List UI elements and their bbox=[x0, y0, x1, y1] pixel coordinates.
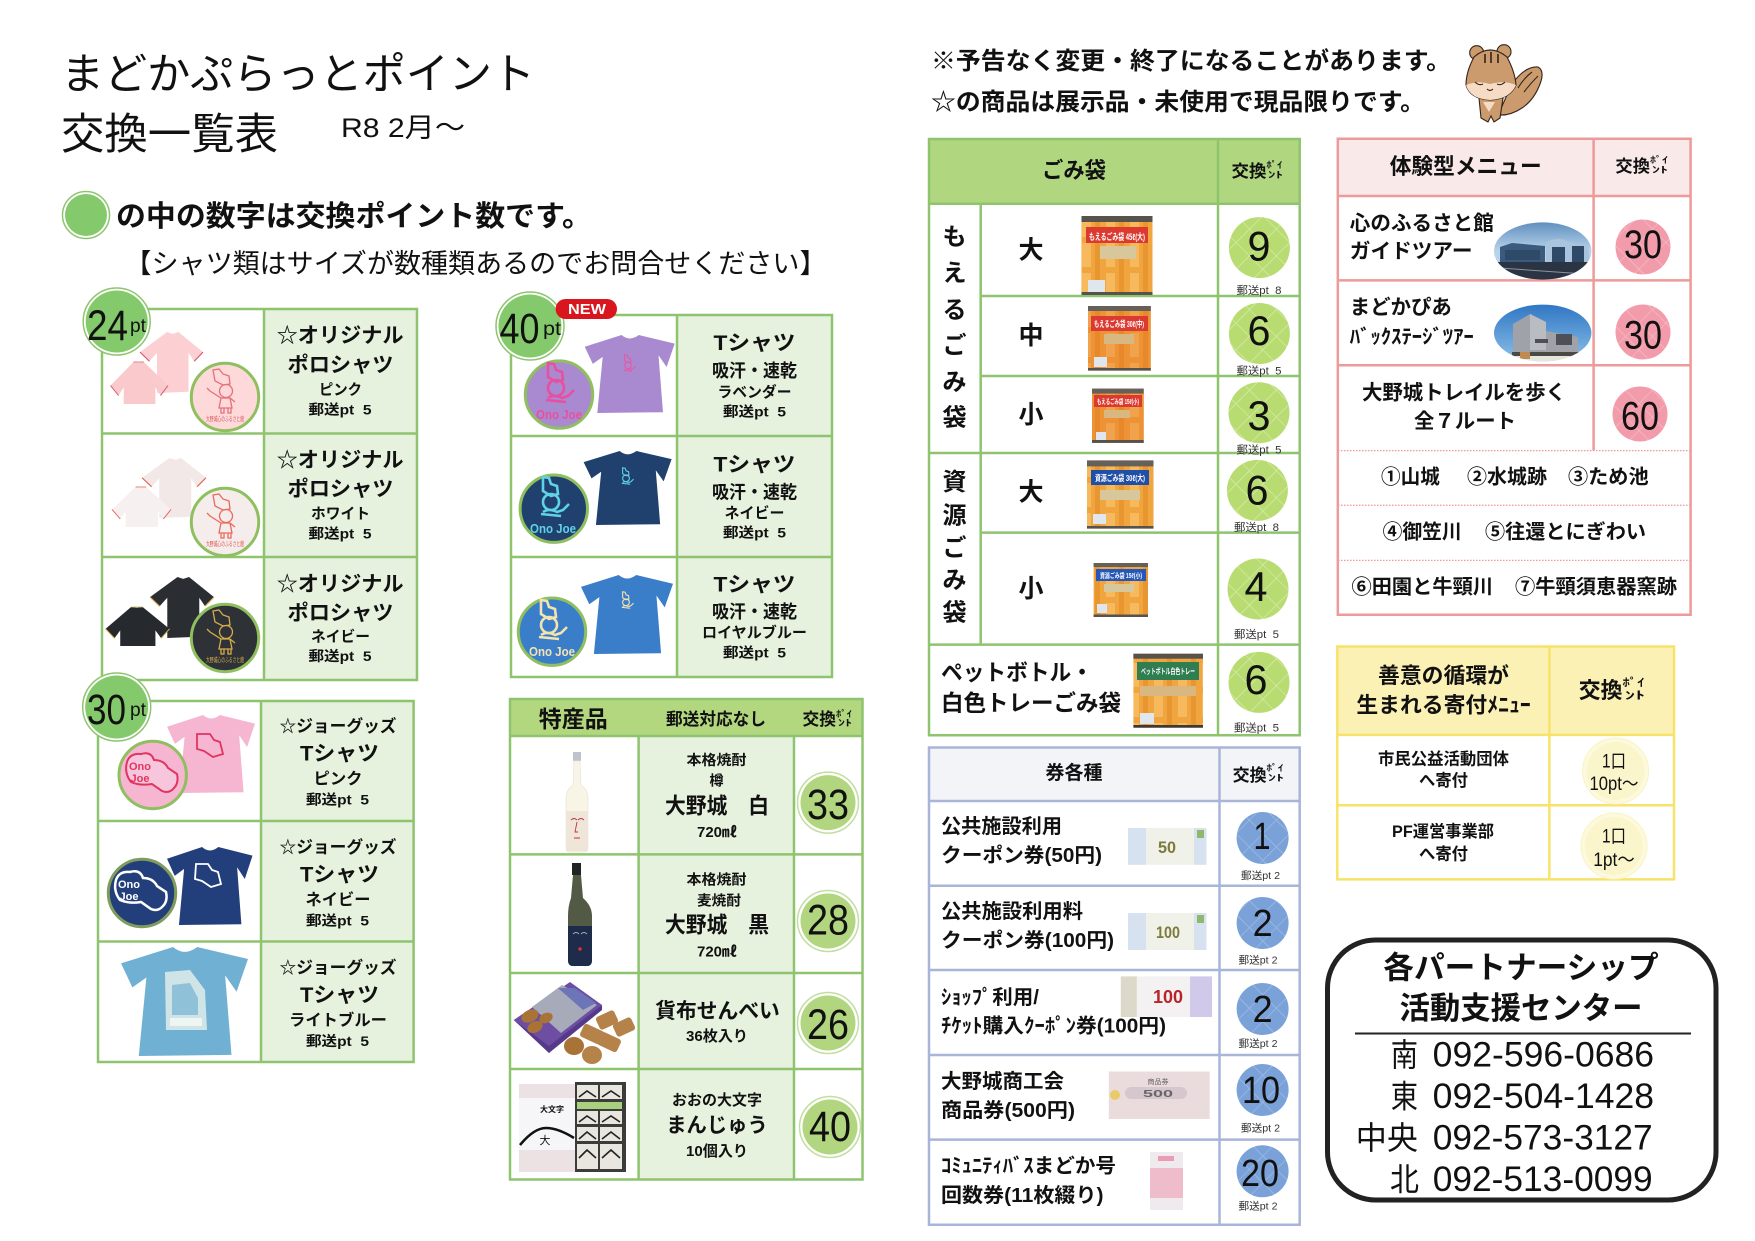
vertical label: recyclable bbox=[942, 469, 966, 626]
point circles bbox=[1237, 812, 1289, 1197]
voucher names: 大野城商工会 bbox=[941, 1070, 1064, 1093]
voucher names: 公共施設利用 bbox=[941, 815, 1062, 838]
product text bbox=[712, 332, 797, 420]
trail routes: ④御笠川 bbox=[1383, 519, 1462, 543]
panel: experience menu bbox=[1338, 139, 1691, 615]
product text: 郵送pt 5 bbox=[723, 645, 786, 661]
product text: 郵送pt 5 bbox=[306, 912, 369, 928]
product text bbox=[277, 573, 404, 664]
header: 交換 bbox=[1232, 162, 1266, 181]
icon: pet bottle bag bbox=[1133, 654, 1203, 728]
new tag: NEW bbox=[568, 302, 606, 318]
shirts: lavender tee: Ono Joe bbox=[536, 407, 582, 422]
donation circle 1pt bbox=[1581, 813, 1647, 879]
shirts: pink tee bbox=[119, 715, 255, 809]
point circles bbox=[798, 772, 860, 1158]
icon: large combustible bag: もえるごみ袋 45ℓ(大) bbox=[1089, 231, 1145, 242]
vertical label: combustible: ご bbox=[942, 332, 966, 360]
product text: Tシャツ bbox=[300, 743, 379, 766]
vertical label: recyclable: 資 bbox=[942, 469, 966, 496]
icon: white shochu bottle bbox=[566, 752, 588, 852]
point circles: 28 bbox=[807, 896, 849, 944]
product text: Tシャツ bbox=[300, 984, 379, 1007]
phone numbers: 092-573-3127 bbox=[1433, 1118, 1653, 1158]
point circles: 20 bbox=[1241, 1153, 1279, 1195]
shipping notes: 郵送pt 8 bbox=[1234, 520, 1279, 534]
point circles: 30 bbox=[1624, 223, 1662, 267]
panel: partnership centers bbox=[1328, 940, 1716, 1200]
notice text bbox=[931, 47, 1451, 116]
phone numbers: 092-513-0099 bbox=[1433, 1160, 1653, 1199]
vertical label: combustible: も bbox=[942, 224, 966, 251]
icon: small combustible bag bbox=[1092, 389, 1144, 443]
point circles: 2 bbox=[1253, 903, 1273, 945]
phone numbers: 092-504-1428 bbox=[1433, 1077, 1654, 1116]
voucher names: 公共施設利用料 bbox=[941, 900, 1083, 923]
icon: manju box bbox=[519, 1082, 626, 1172]
header: ﾎﾟｲ bbox=[1622, 676, 1644, 689]
shipping notes: 郵送pt 5 bbox=[1236, 364, 1282, 378]
voucher names: ｼｮｯﾌﾟ利用/ bbox=[941, 986, 1039, 1009]
product text: ロイヤルブルー bbox=[702, 623, 807, 641]
product text: 郵送pt 5 bbox=[308, 526, 372, 542]
menu text: backstage tour bbox=[1350, 296, 1474, 348]
product text: 麦焼酎 bbox=[697, 893, 741, 909]
photo: Kokoro no Furusato museum bbox=[1494, 222, 1592, 280]
badge: 30pt: pt bbox=[130, 700, 147, 721]
voucher names: 商品券(500円) bbox=[941, 1099, 1075, 1122]
product text: ネイビー bbox=[311, 627, 370, 645]
donation circle 1pt: 1口 bbox=[1602, 826, 1626, 848]
product text: 吸汗・速乾 bbox=[712, 361, 797, 381]
trail routes bbox=[1352, 465, 1677, 598]
coupon 100: 100 bbox=[1156, 923, 1180, 942]
panel: vouchers bbox=[929, 748, 1300, 1225]
badge: 24pt bbox=[83, 288, 150, 355]
header: ﾎﾟｲ bbox=[836, 709, 853, 719]
coupon 100 bbox=[1128, 913, 1206, 950]
trail routes: ⑥田園と牛頸川 bbox=[1352, 576, 1493, 598]
donation row text: PF運営事業部 bbox=[1392, 822, 1494, 841]
shipping notes: 郵送pt 2 bbox=[1238, 953, 1278, 966]
heading: 活動支援センター bbox=[1400, 991, 1642, 1026]
icon: pet bottle bag: ペットボトル白色トレー bbox=[1141, 666, 1195, 676]
product text bbox=[280, 957, 396, 1049]
voucher names bbox=[941, 815, 1166, 1207]
point circles: 2 bbox=[1253, 989, 1273, 1031]
shipping notes: 郵送pt 2 bbox=[1241, 869, 1280, 882]
product text: Tシャツ bbox=[714, 454, 796, 477]
point circles: 6 bbox=[1244, 656, 1268, 703]
icon: large recyclable bag bbox=[1087, 460, 1154, 529]
point circles bbox=[1612, 220, 1670, 442]
panel: 40pt T-shirts bbox=[511, 315, 832, 677]
header bbox=[1356, 663, 1645, 718]
donation row text bbox=[1392, 822, 1494, 863]
header: 交換 bbox=[802, 710, 836, 729]
title: 交換一覧表 bbox=[61, 111, 278, 159]
point circles: 60 bbox=[1621, 394, 1659, 438]
product text: 720㎖ bbox=[697, 944, 737, 960]
shipping notes: 郵送pt 2 bbox=[1238, 1037, 1278, 1050]
phone numbers: 092-596-0686 bbox=[1433, 1036, 1654, 1074]
phone numbers bbox=[1356, 1036, 1654, 1199]
phone numbers: 中央 bbox=[1356, 1120, 1418, 1156]
product text: ピンク bbox=[314, 770, 362, 788]
product text: ポロシャツ bbox=[288, 354, 394, 377]
header: ﾝﾄ bbox=[1268, 170, 1283, 180]
point circles: 4 bbox=[1244, 563, 1268, 610]
product text: 郵送pt 5 bbox=[308, 648, 372, 664]
product text: Tシャツ bbox=[714, 573, 796, 596]
product text: ☆オリジナル bbox=[277, 324, 404, 347]
product text: 吸汗・速乾 bbox=[712, 482, 797, 502]
product text bbox=[665, 872, 769, 960]
point circles: 40 bbox=[809, 1103, 851, 1151]
product text: 郵送pt 5 bbox=[306, 792, 369, 808]
shirts: lavender tee bbox=[525, 335, 675, 428]
donation circle 10pt: 1口 bbox=[1602, 752, 1626, 772]
point circles: 6 bbox=[1248, 307, 1270, 354]
icon: senbei box bbox=[514, 982, 636, 1064]
vertical label: combustible: み bbox=[942, 369, 966, 396]
vertical label: recyclable: 源 bbox=[942, 502, 966, 530]
icon: medium combustible bag bbox=[1088, 306, 1151, 371]
phone numbers: 東 bbox=[1391, 1078, 1418, 1114]
product text: 10個入り bbox=[686, 1143, 748, 1160]
icon: small recyclable bag: 資源ごみ袋 15ℓ(小) bbox=[1100, 571, 1142, 580]
product text: 36枚入り bbox=[686, 1027, 748, 1045]
donation row text bbox=[1378, 748, 1509, 790]
product text: 貨布せんべい bbox=[655, 999, 780, 1023]
title: まどかぷらっとポイント bbox=[61, 51, 535, 99]
menu text: guide tour bbox=[1350, 212, 1494, 263]
notice text: ※予告なく変更・終了になることがあります。 bbox=[931, 47, 1451, 75]
product text: 吸汗・速乾 bbox=[712, 602, 797, 622]
product text: Tシャツ bbox=[300, 863, 379, 886]
header: 交換 bbox=[1615, 157, 1650, 176]
trail routes: ②水城跡 bbox=[1467, 465, 1547, 488]
icon: manju box: 大文字 bbox=[540, 1104, 564, 1114]
product text: 本格焼酎 bbox=[686, 752, 746, 768]
size labels: 大 bbox=[1018, 236, 1044, 264]
title bbox=[61, 51, 535, 159]
voucher names: 回数券(11枚綴り) bbox=[941, 1184, 1104, 1207]
icon: squirrel mascot bbox=[1466, 45, 1542, 122]
coupon shop 100 bbox=[1121, 976, 1212, 1017]
icon: large recyclable bag: 資源ごみ袋 30ℓ(大) bbox=[1095, 473, 1145, 483]
icon: manju box: 大 bbox=[540, 1133, 550, 1147]
vertical label: combustible: え bbox=[942, 260, 966, 287]
product text: ☆ジョーグッズ bbox=[280, 957, 396, 977]
badge: 24pt: pt bbox=[130, 316, 147, 337]
header: 郵送対応なし bbox=[666, 710, 766, 729]
product text bbox=[665, 752, 769, 841]
icon: small recyclable bag bbox=[1094, 563, 1148, 617]
coupon gift 500: 500 bbox=[1143, 1089, 1174, 1100]
shipping notes: 郵送pt 5 bbox=[1234, 627, 1279, 641]
icon: large combustible bag bbox=[1082, 216, 1152, 295]
heading bbox=[1383, 950, 1659, 1026]
photo: Madokapia bbox=[1494, 304, 1592, 362]
product text: ホワイト bbox=[311, 506, 370, 523]
shirts: white polo bbox=[112, 458, 259, 556]
panel: garbage bags bbox=[929, 139, 1300, 735]
product text: まんじゅう bbox=[666, 1114, 768, 1137]
notice text: ☆の商品は展示品・未使用で現品限りです。 bbox=[931, 89, 1425, 116]
shirts: navy polo bbox=[106, 577, 259, 672]
badge: 40pt: pt bbox=[543, 319, 562, 340]
shipping notes bbox=[1234, 283, 1282, 735]
header: 善意の循環が bbox=[1378, 663, 1509, 688]
donation circle 1pt: 1pt～ bbox=[1593, 850, 1635, 871]
badge: 24pt: 24 bbox=[87, 302, 128, 350]
vertical label: recyclable: ご bbox=[942, 534, 966, 562]
point circles: 1 bbox=[1254, 816, 1270, 858]
menu text: backstage tour: ﾊﾞｯｸｽﾃｰｼﾞﾂｱｰ bbox=[1350, 326, 1474, 348]
coupon gift 500: 商品券 bbox=[1148, 1077, 1168, 1086]
panel: specialty products bbox=[510, 699, 862, 1180]
pet bottle tray bag label: ペットボトル・ bbox=[941, 660, 1093, 686]
point circles: 30 bbox=[1624, 314, 1662, 358]
product text bbox=[277, 324, 404, 417]
date note: R8 2月～ bbox=[341, 113, 465, 143]
donation row text: へ寄付 bbox=[1419, 771, 1468, 790]
header: ﾎﾟｲ bbox=[1266, 763, 1284, 773]
phone numbers: 北 bbox=[1390, 1162, 1419, 1198]
product text bbox=[277, 449, 404, 542]
size labels: 小 bbox=[1018, 401, 1044, 429]
shirts: pink polo: 大野城心のふるさと館 bbox=[206, 414, 244, 423]
point circles: 9 bbox=[1248, 222, 1270, 270]
shirts: navy polo: 大野城心のふるさと館 bbox=[206, 655, 244, 664]
badge: 30pt: 30 bbox=[87, 686, 126, 734]
product text: Tシャツ bbox=[714, 332, 796, 355]
shipping notes: 郵送pt 5 bbox=[1236, 443, 1282, 457]
size labels bbox=[1018, 236, 1044, 603]
icon: small combustible bag: もえるごみ袋 15ℓ(小) bbox=[1097, 397, 1139, 406]
trail routes: ⑤往還とにぎわい bbox=[1485, 519, 1646, 543]
shipping notes: 郵送pt 5 bbox=[1234, 721, 1279, 735]
product text: ネイビー bbox=[724, 504, 784, 522]
header: ﾝﾄ bbox=[1268, 773, 1284, 783]
icon: black shochu bottle bbox=[568, 863, 592, 966]
coupon shop 100: 100 bbox=[1153, 987, 1183, 1007]
voucher names: クーポン券(100円) bbox=[941, 929, 1114, 952]
product text: ピンク bbox=[319, 381, 362, 398]
header bbox=[1390, 154, 1669, 179]
new tag bbox=[556, 299, 617, 319]
product text: ポロシャツ bbox=[288, 478, 394, 501]
legend text: の中の数字は交換ポイント数です。 bbox=[116, 200, 592, 233]
shirts: royal blue tee: Ono Joe bbox=[529, 644, 575, 659]
menu text: guide tour: ガイドツアー bbox=[1350, 240, 1472, 263]
shirts: navy tee bbox=[108, 847, 252, 927]
header: ごみ袋 bbox=[1042, 158, 1106, 183]
vertical label: recyclable: 袋 bbox=[942, 600, 966, 626]
product text bbox=[280, 716, 396, 808]
heading: 各パートナーシップ bbox=[1383, 950, 1659, 986]
shipping notes: 郵送pt 8 bbox=[1236, 283, 1282, 297]
product text: 郵送pt 5 bbox=[308, 401, 372, 417]
donation row text: へ寄付 bbox=[1419, 844, 1468, 863]
pet bottle tray bag label: 白色トレーごみ袋 bbox=[941, 690, 1121, 716]
header: ﾎﾟｲ bbox=[1650, 155, 1669, 165]
shipping notes bbox=[1238, 869, 1280, 1213]
voucher names: ﾁｹｯﾄ購入ｸｰﾎﾟﾝ券(100円) bbox=[941, 1014, 1166, 1038]
menu text: trail: 全７ルート bbox=[1414, 410, 1516, 433]
product text: ラベンダー bbox=[718, 383, 792, 401]
shirts: pink polo bbox=[110, 332, 259, 431]
vertical label: combustible: 袋 bbox=[942, 404, 966, 432]
shirts: light blue tee bbox=[121, 947, 248, 1056]
product text: 郵送pt 5 bbox=[723, 404, 786, 420]
vertical label: recyclable: み bbox=[942, 567, 966, 594]
shirts: white polo: 大野城心のふるさと館 bbox=[206, 539, 244, 548]
panel: donation menu bbox=[1337, 646, 1674, 879]
point circles: 26 bbox=[807, 1001, 849, 1049]
badge: 40pt: 40 bbox=[500, 305, 540, 353]
trail routes: ③ため池 bbox=[1568, 465, 1649, 488]
product text: ☆オリジナル bbox=[277, 449, 404, 472]
menu text: trail: 大野城トレイルを歩く bbox=[1362, 381, 1566, 404]
product text: 大野城 黒 bbox=[665, 913, 769, 938]
coupon 50 bbox=[1128, 828, 1206, 865]
product text: 大野城 白 bbox=[665, 794, 769, 818]
header: 交換 bbox=[1233, 766, 1267, 785]
menu text: trail bbox=[1362, 381, 1566, 433]
product text bbox=[655, 999, 780, 1045]
product text bbox=[702, 573, 807, 661]
product text: ☆オリジナル bbox=[277, 573, 404, 596]
bus ticket bbox=[1150, 1152, 1183, 1210]
trail routes: ⑦牛頸須恵器窯跡 bbox=[1515, 576, 1677, 598]
badge: 30pt bbox=[83, 673, 151, 741]
vertical label: combustible bbox=[942, 224, 966, 432]
header: 生まれる寄付ﾒﾆｭｰ bbox=[1356, 694, 1531, 718]
badge: 40pt bbox=[496, 292, 564, 360]
phone numbers: 南 bbox=[1391, 1037, 1418, 1073]
shipping notes: 郵送pt 2 bbox=[1238, 1200, 1278, 1213]
product text bbox=[666, 1091, 768, 1160]
voucher names: ｺﾐｭﾆﾃｨﾊﾞｽまどか号 bbox=[941, 1155, 1116, 1178]
product text: ☆ジョーグッズ bbox=[280, 716, 396, 736]
product text: 720㎖ bbox=[697, 824, 737, 841]
icon: medium combustible bag: もえるごみ袋 30ℓ(中) bbox=[1094, 319, 1144, 329]
product text: ライトブルー bbox=[289, 1011, 387, 1030]
product text: ☆ジョーグッズ bbox=[280, 837, 396, 857]
shirts: navy tee: Ono Joe bbox=[530, 521, 576, 536]
product text: ポロシャツ bbox=[288, 602, 394, 625]
product text: 本格焼酎 bbox=[686, 872, 746, 888]
product text bbox=[712, 454, 797, 541]
header: ﾝﾄ bbox=[1652, 165, 1668, 175]
panel: 24pt polo shirts bbox=[102, 309, 417, 680]
header bbox=[539, 706, 853, 732]
product text: 郵送pt 5 bbox=[306, 1033, 369, 1049]
header bbox=[1046, 761, 1284, 785]
panel: 30pt Jo goods T-shirts bbox=[98, 701, 414, 1062]
point circles: 3 bbox=[1248, 392, 1270, 439]
header: 券各種 bbox=[1046, 761, 1102, 784]
point circles: 33 bbox=[807, 781, 849, 829]
shirts: pink tee: Joe bbox=[131, 773, 149, 785]
point circles bbox=[1227, 217, 1290, 713]
header: ﾎﾟｲ bbox=[1266, 160, 1283, 170]
product text: ネイビー bbox=[306, 890, 370, 909]
menu text: backstage tour: まどかぴあ bbox=[1350, 296, 1452, 319]
coupon gift 500 bbox=[1109, 1072, 1210, 1119]
legend: green circle bbox=[62, 192, 110, 238]
product text: 樽 bbox=[710, 772, 724, 788]
coupon 50: 50 bbox=[1158, 838, 1176, 857]
voucher names: クーポン券(50円) bbox=[941, 844, 1102, 867]
product text: 郵送pt 5 bbox=[723, 525, 786, 541]
size labels: 大 bbox=[1018, 478, 1044, 506]
size labels: 小 bbox=[1018, 575, 1044, 603]
shirts: navy tee: Joe bbox=[120, 891, 138, 903]
donation circle 10pt bbox=[1583, 738, 1649, 804]
size labels: 中 bbox=[1018, 322, 1044, 350]
product text bbox=[280, 837, 396, 928]
shirts: pink tee: Ono bbox=[129, 761, 151, 773]
vertical label: combustible: る bbox=[942, 297, 966, 324]
menu text: guide tour: 心のふるさと館 bbox=[1350, 212, 1494, 235]
donation row text: 市民公益活動団体 bbox=[1378, 748, 1509, 768]
header: 特産品 bbox=[539, 706, 608, 732]
product text: おおの大文字 bbox=[672, 1091, 762, 1109]
header: ﾝﾄ bbox=[838, 718, 852, 728]
shirts: royal blue tee bbox=[518, 575, 673, 665]
donation circle 10pt: 10pt～ bbox=[1590, 774, 1638, 795]
shirts: navy tee bbox=[520, 451, 672, 542]
header: 体験型メニュー bbox=[1390, 154, 1542, 179]
point circles: 6 bbox=[1246, 466, 1268, 513]
header bbox=[1042, 158, 1283, 183]
shirts note: 【シャツ類はサイズが数種類あるのでお問合せください】 bbox=[124, 249, 826, 279]
shirts: navy tee: Ono bbox=[118, 879, 140, 891]
point circles: 10 bbox=[1242, 1070, 1280, 1112]
shipping notes: 郵送pt 2 bbox=[1241, 1122, 1280, 1135]
trail routes: ①山城 bbox=[1381, 465, 1440, 488]
pet bottle tray bag label bbox=[941, 660, 1121, 716]
header: 交換 bbox=[1579, 678, 1622, 703]
header: ﾝﾄ bbox=[1625, 690, 1645, 702]
